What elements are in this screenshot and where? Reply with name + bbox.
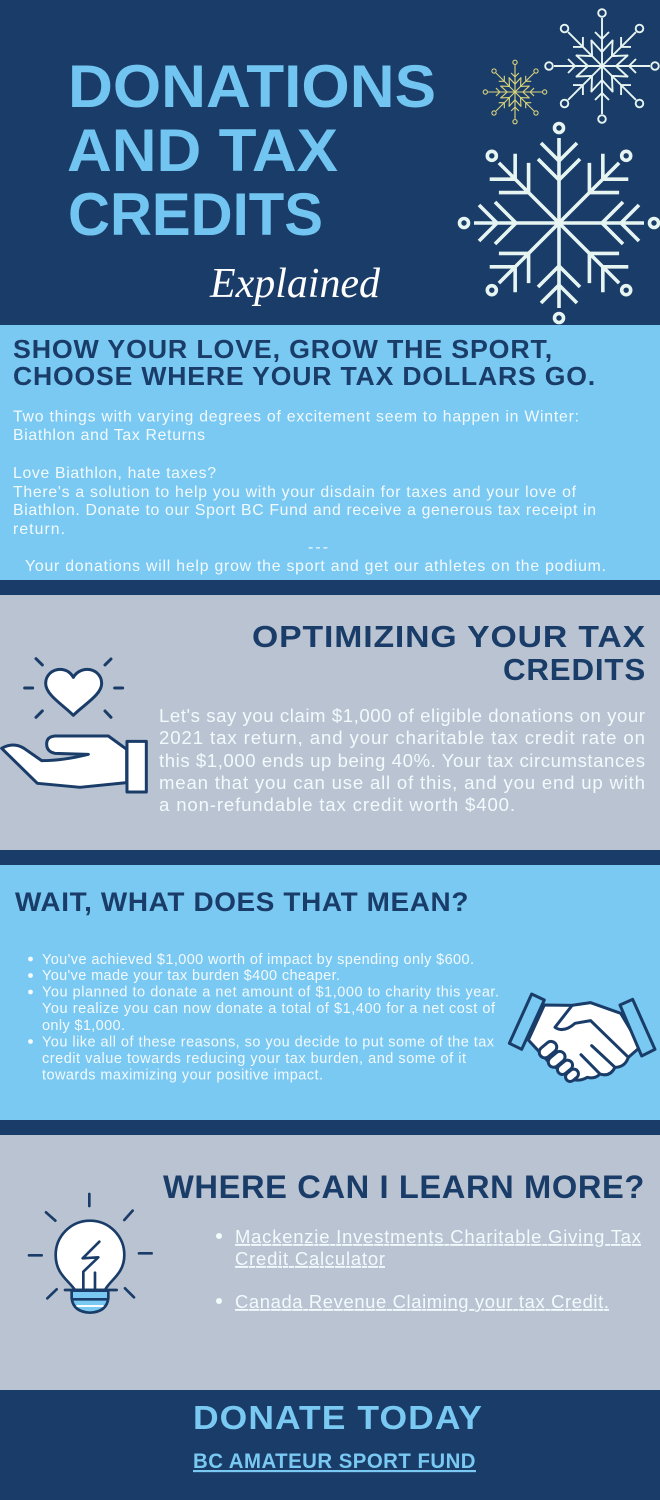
link list: Canada Revenue Claiming your tax Credit.: [235, 1291, 609, 1312]
text block: intro: Two things with varying degrees of excitement seem to happen in Winter:: [13, 408, 579, 426]
link list: Mackenzie Investments Charitable Giving Tax: [235, 1226, 641, 1247]
heading: show your love: SHOW YOUR LOVE, GROW THE SPORT,: [13, 334, 553, 364]
title: [67, 53, 436, 248]
bullet list: meaning: towards maximizing your positive impact.: [42, 1068, 323, 1084]
panel: optimizing your tax credits: [0, 595, 660, 850]
subtitle: explained: Explained: [209, 261, 381, 307]
icon: handshake: [509, 994, 655, 1083]
panel: wait what does that mean: [0, 865, 660, 1120]
bullet list: meaning: You realize you can now donate a total of $1,400 for a net cost of: [42, 1001, 496, 1017]
text block: optimizing body: [159, 705, 645, 815]
heading: optimizing: [252, 619, 646, 687]
heading: optimizing: OPTIMIZING YOUR TAX: [252, 619, 646, 654]
icon: small gold snowflake: [483, 60, 547, 124]
panel: where can I learn more: [0, 1135, 660, 1390]
bullet list: meaning: You've made your tax burden $400 cheaper.: [42, 968, 340, 984]
text block: intro: Your donations will help grow the sport and get our athletes on the podium.: [25, 558, 606, 575]
text block: optimizing body: 2021 tax return, and your charitable tax credit rate on: [159, 727, 645, 748]
link: bc amateur sport fund: BC AMATEUR SPORT FUND: [193, 1449, 476, 1473]
text block: optimizing body: Let's say you claim $1,000 of eligible donations on your: [159, 705, 645, 726]
text block: intro: Love Biathlon, hate taxes?: [13, 465, 216, 482]
text block: intro: Biathlon. Donate to our Sport BC Fund and receive a generous tax receipt in: [13, 502, 596, 519]
heading: show your love: CHOOSE WHERE YOUR TAX DOLLARS GO.: [13, 361, 596, 391]
icon: large snowflake: [460, 124, 658, 322]
link list: Credit Calculator: [235, 1248, 385, 1269]
icon: medium snowflake: [545, 9, 659, 123]
text block: intro: Biathlon and Tax Returns: [13, 427, 205, 444]
panel: header: [67, 9, 659, 322]
text block: optimizing body: a non-refundable tax credit worth $400.: [159, 794, 515, 815]
panel: footer: [193, 1400, 483, 1473]
heading: show your love: [13, 334, 596, 391]
bullet list: meaning: only $1,000.: [42, 1018, 125, 1034]
text block: optimizing body: mean that you can use all of this, and you end up with: [159, 772, 645, 793]
text block: intro: return.: [13, 521, 65, 538]
title: CREDITS: [68, 181, 323, 248]
text block: intro: ---: [308, 539, 328, 556]
bullet list: meaning: [28, 952, 499, 1084]
bullet list: meaning: You've achieved $1,000 worth of impact by spending only $600.: [42, 952, 474, 968]
heading: wait: WAIT, WHAT DOES THAT MEAN?: [15, 887, 469, 917]
icon: light bulb: [29, 1194, 152, 1313]
heading: optimizing: CREDITS: [503, 652, 646, 687]
text block: intro: There's a solution to help you with your disdain for taxes and your love of: [13, 484, 577, 501]
panel: show your love: [0, 325, 660, 580]
text block: intro: [13, 408, 606, 575]
link list: [216, 1226, 641, 1312]
heading: learn more: WHERE CAN I LEARN MORE?: [163, 1169, 645, 1205]
text block: optimizing body: this $1,000 ends up being 40%. Your tax circumstances: [159, 750, 645, 771]
bullet list: meaning: credit value towards reducing your tax burden, and some of it: [42, 1051, 466, 1067]
bullet list: meaning: You like all of these reasons, so you decide to put some of the tax: [42, 1034, 495, 1050]
title: DONATIONS: [68, 53, 436, 120]
bullet list: meaning: You planned to donate a net amount of $1,000 to charity this year.: [42, 984, 499, 1000]
icon: hand holding heart: [2, 659, 146, 792]
title: AND TAX: [67, 117, 338, 184]
call to action: DONATE TODAY: [193, 1400, 483, 1437]
